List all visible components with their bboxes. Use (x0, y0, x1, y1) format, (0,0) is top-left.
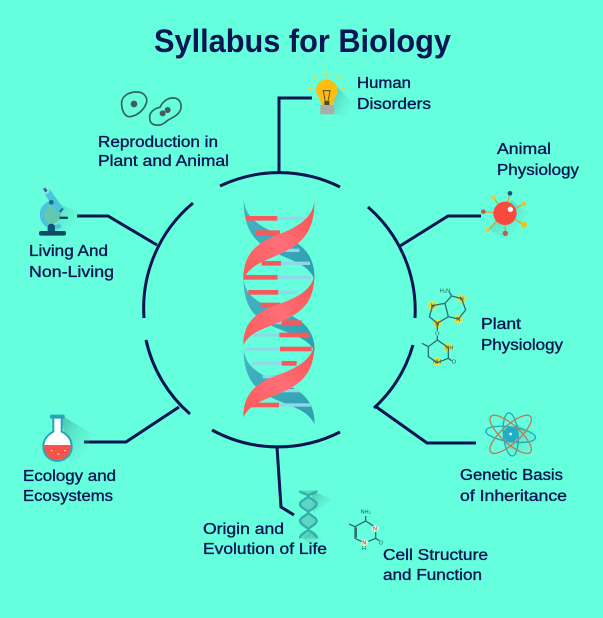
label: Origin and Evolution of Life (203, 521, 327, 558)
icon: plant physiology molecules: O (452, 360, 457, 366)
label: Ecology and Ecosystems (23, 468, 116, 505)
icon: virus cell (481, 191, 528, 240)
label: Reproduction in Plant and Animal: Reproduction in (98, 134, 218, 151)
icon: plant physiology molecules: H₂N (440, 288, 450, 294)
icon: microscope (39, 185, 80, 237)
label: Human Disorders: Human (357, 75, 411, 92)
label: Plant Physiology: Physiology (481, 337, 563, 354)
label: Reproduction in Plant and Animal (98, 134, 229, 170)
label: Living And Non-Living: Living And (29, 243, 108, 260)
label: Genetic Basis of Inheritance: Genetic Basis (460, 467, 563, 484)
label: Cell Structure and Function: Cell Structure (383, 547, 488, 564)
label: Human Disorders: Disorders (357, 96, 431, 113)
label: Animal Physiology: Animal (497, 141, 551, 158)
title: Syllabus for Biology (154, 23, 451, 59)
icon: plant physiology molecules: N (435, 321, 439, 327)
icon: cell structure molecule: H (362, 546, 366, 552)
label: Living And Non-Living: Non-Living (29, 264, 114, 281)
red front strands (243, 201, 314, 417)
label: Human Disorders (357, 75, 431, 113)
label: Ecology and Ecosystems: Ecology and (23, 468, 116, 485)
label: Plant Physiology (481, 316, 563, 354)
label: Origin and Evolution of Life: Evolution of Life (203, 541, 327, 558)
icon: flask (43, 415, 92, 463)
label: Genetic Basis of Inheritance: of Inheritance (460, 488, 567, 505)
icon: plant physiology molecules: N (460, 297, 464, 303)
label: Animal Physiology: Physiology (497, 162, 579, 179)
icon: cell structure molecule: O (379, 541, 384, 547)
icon: plant physiology molecules: NH (433, 360, 441, 366)
icon: plant physiology molecules: N (431, 304, 435, 310)
icon: cell structure molecule: N (362, 541, 366, 547)
label: Living And Non-Living (29, 243, 114, 281)
label: Origin and Evolution of Life: Origin and (203, 521, 284, 538)
central circle arcs and connectors (77, 98, 481, 515)
icon: atom (485, 410, 538, 460)
label: Cell Structure and Function: and Function (383, 567, 482, 584)
central DNA double helix (243, 198, 315, 424)
icon: plant physiology molecules: NH (445, 346, 453, 352)
label: Cell Structure and Function (383, 547, 488, 584)
icon: cell structure molecule: N (373, 527, 377, 533)
label: Animal Physiology (497, 141, 579, 179)
icon: plant physiology molecules (422, 288, 466, 366)
label: Ecology and Ecosystems: Ecosystems (23, 488, 113, 505)
icon: light bulb (308, 73, 353, 118)
icon: small DNA helix (300, 491, 333, 545)
label: Reproduction in Plant and Animal: Plant and Animal (98, 153, 229, 170)
icon: cell structure molecule (349, 509, 384, 552)
label: Genetic Basis of Inheritance (460, 467, 567, 505)
icon: cells (122, 92, 181, 125)
icon: cell structure molecule: NH₂ (360, 509, 371, 515)
label: Plant Physiology: Plant (481, 316, 522, 333)
base pair rungs (243, 216, 312, 407)
icon: plant physiology molecules: O (435, 331, 440, 337)
icon: plant physiology molecules: N (456, 317, 460, 323)
teal back strands (244, 198, 315, 424)
